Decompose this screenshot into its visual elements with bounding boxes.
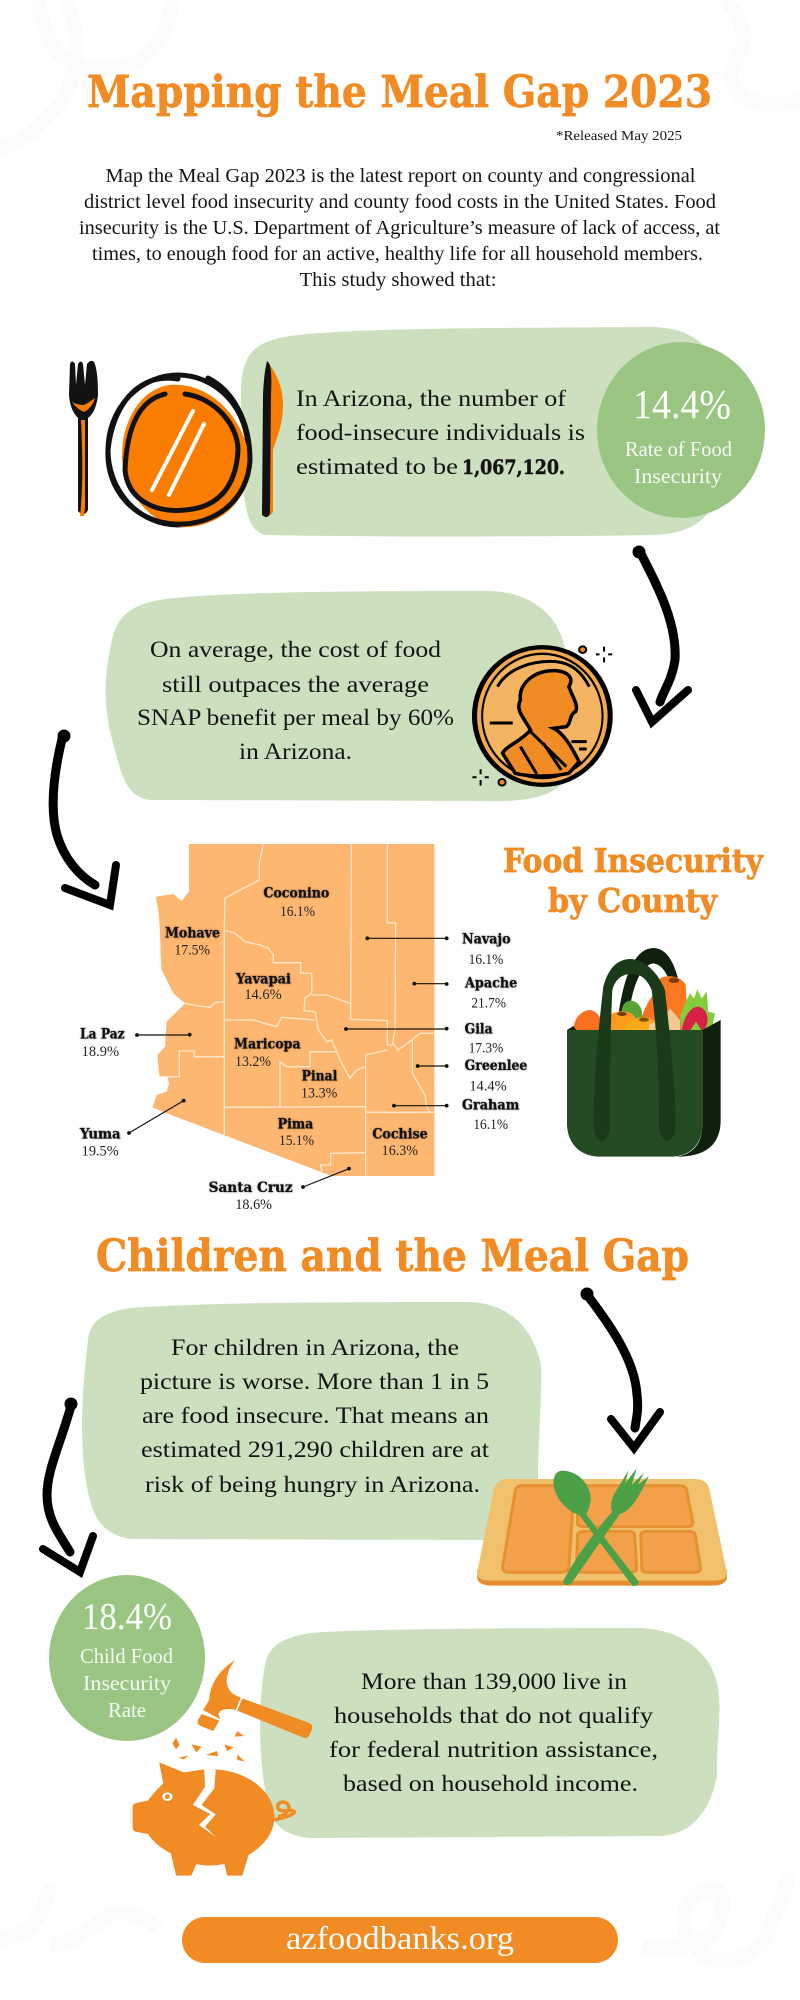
arrow: rate to penny [634,547,688,722]
icon: hammer and broken piggy bank [133,1660,312,1876]
footer website pill: azfoodbanks.org [286,1921,514,1957]
callout: rate of food insecurity: 14.4% [633,381,731,427]
panel text [329,1669,658,1797]
map county labels: 17.3% [469,1041,503,1057]
map county labels: 16.1% [473,1117,508,1133]
callout: rate of food insecurity: Rate of Food [625,437,732,461]
intro text block: Map the Meal Gap 2023 is the latest report on county and congressional [106,165,696,187]
panel text: 1,067,120. [462,455,565,479]
icon: knife [262,361,283,517]
arrow: panel to child rate [43,1398,93,1572]
map county labels: Greenlee [465,1058,527,1074]
icon: school lunch tray with spoon and fork [477,1468,727,1586]
map county labels: 18.6% [235,1197,272,1213]
icon: penny [472,645,613,787]
panel text [296,386,585,480]
map county labels: 17.5% [174,942,210,958]
map county labels: Yuma [79,1126,121,1142]
icon: coin shards [172,1731,245,1762]
panel text: for federal nutrition assistance, [329,1737,658,1763]
panel text [137,637,454,765]
map county labels: Gila [465,1021,493,1037]
panel: cost of food versus SNAP [106,591,565,801]
icon: fork, plate and knife [69,361,283,527]
panel text: More than 139,000 live in [361,1669,627,1695]
map county labels [79,886,527,1213]
callout: rate of food insecurity [597,342,765,518]
callout: rate of food insecurity: Insecurity [634,464,723,488]
callout: child food insecurity rate: Rate [108,1698,146,1722]
callout: child food insecurity rate: Insecurity [83,1671,172,1695]
map county labels: La Paz [80,1026,125,1042]
panel text: risk of being hungry in Arizona. [145,1472,480,1498]
map county labels: 13.2% [235,1054,271,1070]
map county labels: 18.9% [82,1044,119,1060]
intro text block: times, to enough food for an active, healthy life for all household members. [92,243,703,265]
map county labels: 16.3% [382,1143,418,1159]
panel text: in Arizona. [239,739,352,765]
intro text block: This study showed that: [300,269,496,291]
panel text: still outpaces the average [162,672,429,698]
panel: households not qualifying [260,1628,719,1838]
panel: Arizona food-insecure individuals [240,327,720,536]
icon: grocery bag [567,948,721,1157]
map county labels: Coconino [263,886,329,902]
heading: food insecurity by county [503,841,764,920]
map county labels: 21.7% [471,995,506,1011]
arrow: heading to tray [582,1288,660,1448]
callout: child food insecurity rate: 18.4% [82,1596,172,1638]
map: Arizona counties [79,844,527,1213]
panel text: are food insecure. That means an [142,1403,489,1429]
map county labels: 15.1% [279,1133,314,1149]
map county labels: Graham [462,1097,520,1113]
map county labels: 16.1% [469,952,503,968]
arrow: penny to map [53,730,116,905]
map county labels: Apache [464,975,517,991]
panel text: In Arizona, the number of [296,386,566,412]
map county labels: 19.5% [82,1144,119,1160]
map county labels: 13.3% [301,1086,337,1102]
map county labels: Maricopa [234,1037,301,1053]
panel text: For children in Arizona, the [171,1335,459,1361]
map county labels: Pima [278,1116,313,1132]
panel text: households that do not qualify [334,1703,653,1729]
intro text block: district level food insecurity and county food costs in the United States. Food [84,191,716,213]
map county labels: 14.6% [244,987,282,1003]
panel text: food-insecure individuals is [296,420,585,446]
map county labels: Mohave [165,925,220,941]
panel text: picture is worse. More than 1 in 5 [140,1369,489,1395]
panel text: SNAP benefit per meal by 60% [137,705,454,731]
heading: children and the meal gap: Children and the Meal Gap [96,1231,689,1282]
icon: hammer [197,1660,312,1738]
heading: food insecurity by county: Food Insecurity [503,841,764,880]
icon: plate [108,375,250,527]
panel text: based on household income. [343,1771,638,1797]
release note: *Released May 2025 [556,129,682,144]
panel text: estimated 291,290 children are at [141,1437,490,1463]
title: Mapping the Meal Gap 2023 [87,67,712,118]
map county labels: Cochise [372,1126,428,1142]
panel text: On average, the cost of food [150,637,441,663]
icon: fork [69,361,98,516]
map county labels: Navajo [462,931,511,947]
panel text: estimated to be [296,454,458,480]
panel: children food insecurity [82,1302,541,1540]
map county labels: Santa Cruz [209,1180,293,1196]
map leader lines [128,937,448,1188]
intro text block [79,165,720,291]
heading: food insecurity by county: by County [548,881,718,920]
panel text [140,1335,490,1498]
callout: child food insecurity rate: Child Food [80,1644,173,1668]
map county labels: 14.4% [469,1079,507,1095]
map county labels: 16.1% [280,904,315,920]
footer website pill [182,1917,618,1963]
callout: child food insecurity rate [49,1575,205,1741]
map county labels: Pinal [302,1069,337,1085]
intro text block: insecurity is the U.S. Department of Agriculture’s measure of lack of access, at [79,217,720,239]
map county labels: Yavapai [235,971,291,987]
icon: piggy bank [133,1762,294,1876]
